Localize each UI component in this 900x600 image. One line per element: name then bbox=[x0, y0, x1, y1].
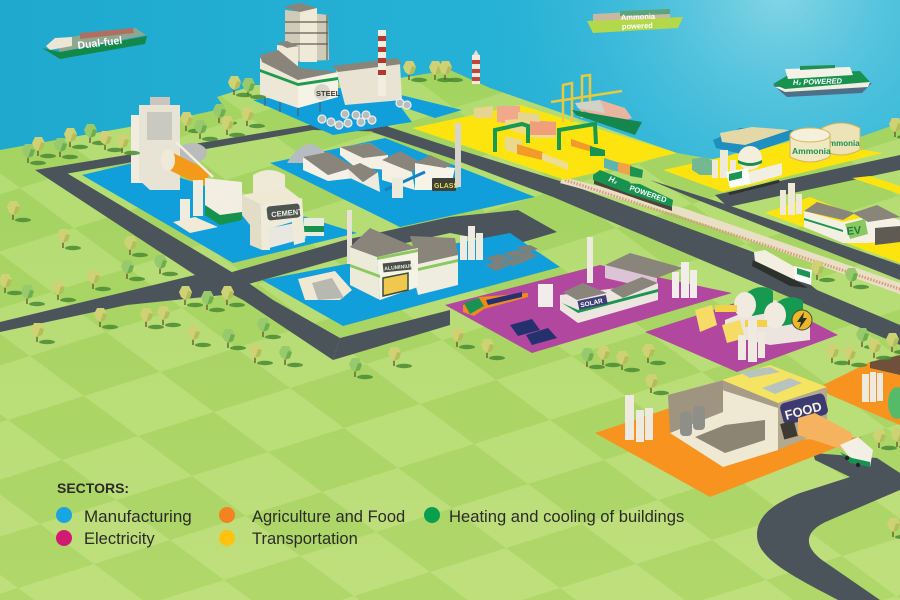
panel: aluminium site plate bbox=[262, 233, 560, 326]
silo with sign bbox=[242, 170, 324, 250]
steel hall: STEEL bbox=[316, 89, 341, 98]
trees bbox=[0, 61, 900, 539]
panel: farm orange plate bbox=[817, 362, 900, 425]
ship: ammonia powered: Ammonia bbox=[621, 12, 656, 22]
dome bbox=[177, 143, 207, 163]
electricity generators bbox=[695, 287, 812, 362]
panel: port yellow plate bbox=[412, 105, 677, 180]
legend: heating and cooling of buildings: Heating and cooling of buildings bbox=[449, 507, 684, 526]
solar plant: SOLAR bbox=[580, 298, 604, 309]
chimney bbox=[378, 30, 386, 96]
ammonia tank front bbox=[790, 128, 831, 162]
preheater tower bbox=[131, 97, 180, 190]
legend heading: SECTORS: bbox=[57, 480, 129, 496]
ammonia tank front: Ammonia bbox=[792, 146, 831, 156]
port: containers bbox=[474, 106, 556, 138]
food plant: FOOD bbox=[783, 399, 823, 423]
ammonia tank back bbox=[822, 123, 860, 155]
port: green gantries and train bbox=[495, 124, 596, 170]
panel: cement site plate bbox=[82, 163, 357, 263]
legend: manufacturing: Manufacturing bbox=[84, 507, 192, 526]
panel: solar purple plate bbox=[445, 265, 732, 353]
long shed bbox=[336, 64, 402, 105]
panel: power purple plate bbox=[645, 295, 838, 372]
panel: glass site plate bbox=[270, 138, 535, 227]
port: yellow cranes bbox=[551, 75, 622, 122]
food truck bbox=[798, 413, 873, 467]
panel: food orange plate bbox=[595, 408, 863, 497]
panel: EV yellow plate bbox=[765, 197, 900, 263]
aluminium plant: ALUMINIUM bbox=[384, 263, 414, 272]
legend: transportation: Transportation bbox=[252, 530, 358, 548]
ship: H2 powered bbox=[773, 65, 872, 97]
food plant bbox=[625, 365, 873, 467]
steel hall bbox=[260, 50, 341, 116]
ammonia terminal bbox=[692, 123, 860, 195]
clinker block bbox=[173, 178, 242, 233]
H2 powered train: H₂ bbox=[607, 174, 619, 186]
panel: ammonia yellow plate bbox=[663, 140, 883, 192]
lighthouse bbox=[472, 50, 480, 84]
solar panel truck bbox=[463, 292, 528, 316]
H2 powered train bbox=[593, 170, 673, 211]
H2 powered train: POWERED bbox=[628, 183, 668, 205]
road truck bbox=[604, 158, 643, 178]
solar plant bbox=[463, 237, 697, 345]
legend: electricity: Electricity bbox=[84, 530, 155, 548]
ship: dual-fuel: Dual-fuel bbox=[77, 35, 123, 52]
ship: H2 powered: H₂ POWERED bbox=[793, 76, 843, 87]
rail track bbox=[560, 177, 900, 294]
glass plant bbox=[287, 123, 461, 198]
EV plant bbox=[780, 183, 900, 245]
tanker truck bbox=[726, 163, 782, 195]
legend bbox=[56, 480, 684, 548]
ship: ammonia powered bbox=[587, 9, 683, 33]
aluminium plant bbox=[298, 210, 538, 300]
yellow strip top right bbox=[852, 176, 900, 194]
port: container ship bbox=[572, 100, 642, 135]
ammonia tank back: mmonia bbox=[829, 139, 860, 148]
ship: ammonia powered: powered bbox=[622, 21, 653, 31]
steel coils bbox=[318, 99, 411, 129]
legend: agriculture and food: Agriculture and Food bbox=[252, 508, 405, 526]
farm buildings bbox=[862, 355, 900, 419]
tanker truck on road bbox=[752, 250, 812, 288]
road network bbox=[0, 124, 900, 600]
EV plant: EV bbox=[846, 224, 863, 238]
steel tower bbox=[277, 3, 329, 75]
silo with sign: CEMENT bbox=[271, 207, 304, 219]
cement plant bbox=[131, 97, 324, 250]
glass plant: GLASS bbox=[434, 183, 458, 190]
ship: dual-fuel bbox=[42, 28, 147, 59]
solar panels bbox=[510, 319, 557, 345]
kiln bbox=[161, 142, 213, 179]
steel plant bbox=[260, 3, 411, 129]
panel: steel site plate bbox=[253, 85, 462, 135]
port truck bbox=[571, 139, 605, 156]
